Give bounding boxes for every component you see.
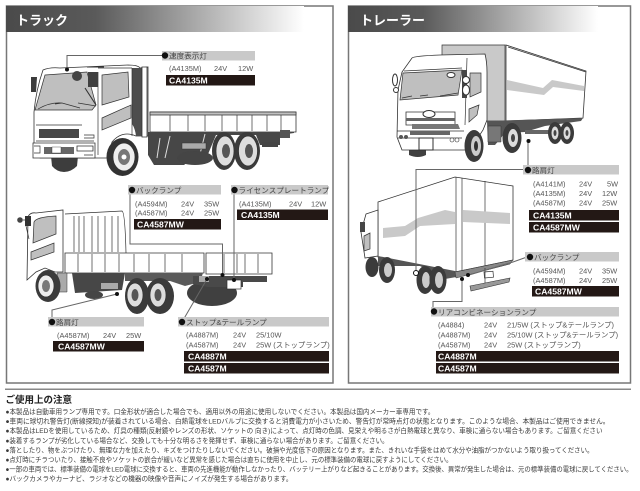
trailer illustration: rear three-quarter view: [360, 177, 513, 294]
leader line: license plate lamp: [233, 190, 235, 280]
callout: back lamp: 24V: [579, 276, 592, 285]
callout: back lamp: CA4587MW: [137, 220, 185, 230]
callout: back lamp: (A4587M): [533, 276, 565, 285]
callout: back lamp: バックランプ: [534, 253, 580, 262]
notes list: ●車両に球切れ警告灯(断線探知)が装着されている場合、白熱電球をLEDバルブに交換すると消費電力が小さいため、警告灯が常時点灯の状態となります。このような場合、本製品はご使用できません。: [6, 417, 610, 426]
callout: back lamp: バックランプ: [136, 186, 182, 195]
callout: stop and tail lamp: ストップ&テールランプ: [186, 318, 267, 327]
leader line: back lamp: [130, 190, 222, 275]
trailer illustration: front three-quarter view: [392, 45, 586, 162]
callout: side marker lamp: CA4587MW: [533, 222, 581, 232]
callout: back lamp: (A4594M): [135, 200, 167, 208]
callout: rear combination lamp: CA4887M: [438, 352, 477, 362]
callout: back lamp: 25W: [602, 276, 617, 285]
callout: speed indicator: 12W: [238, 64, 253, 73]
leader line: speed indicator: [67, 56, 162, 69]
callout: stop and tail lamp: (A4587M): [186, 340, 218, 350]
heading: trailer: [348, 6, 598, 32]
notes list: ●本製品はLEDを使用しているため、灯具の種類(反射鏡やレンズの形状、ソケットの 向き)によって、点灯時の色調、見栄えや明るさが白熱電球と異なり、車検に通らない場合もあります。ご留意ください: [6, 426, 603, 435]
callout: back lamp: 35W: [204, 200, 219, 208]
notes list: ●点灯時にチラついたり、接触不良やソケットの嵌合が緩いなど異常を感じた場合は直ちに使用を中止し、元の標準装備の電球に戻すようにしてください。: [6, 455, 452, 464]
callout: rear combination lamp: (A4884): [438, 320, 464, 330]
callout: back lamp: (A4594M): [533, 266, 565, 276]
callout: rear combination lamp: [431, 307, 619, 374]
marker: stop and tail lamp: [205, 277, 209, 281]
leader line: stop and tail lamp: [182, 279, 207, 322]
callout: side marker lamp: 24V: [579, 189, 592, 198]
callout: stop and tail lamp: 24V: [233, 340, 246, 350]
marker: license plate lamp: [232, 278, 236, 282]
callout: side marker lamp: 24V: [579, 198, 592, 208]
notes section: [5, 388, 632, 483]
callout: rear combination lamp: 25/10W (ストップ&テールランプ): [507, 330, 618, 340]
heading: truck: トラック: [16, 13, 68, 28]
callout: side marker lamp: 12W: [602, 189, 617, 198]
callout: back lamp: 24V: [181, 200, 194, 208]
callout: license plate lamp: [231, 185, 330, 220]
callout: side marker lamp: CA4135M: [533, 210, 572, 220]
callout: speed indicator: CA4135M: [169, 76, 208, 86]
callout: back lamp: 24V: [579, 266, 592, 276]
callout: side marker lamp: 路肩灯: [56, 317, 79, 327]
callout: rear combination lamp: CA4587M: [438, 364, 477, 374]
truck illustration: rear three-quarter view: [17, 210, 272, 314]
leader line: side marker: [52, 294, 117, 322]
callout: back lamp: 24V: [181, 208, 194, 218]
callout: rear combination lamp: 24V: [484, 340, 497, 350]
callout: stop and tail lamp: 25W (ストップランプ): [256, 340, 330, 350]
callout: back lamp: CA4587MW: [535, 286, 583, 296]
callout: side marker lamp: (A4135M): [533, 189, 565, 198]
marker: speed indicator lamp: [65, 68, 69, 72]
leader line: side marker rear view: [416, 170, 523, 273]
callout: side marker lamp: (A4141M): [533, 180, 565, 188]
callout: speed indicator: 24V: [214, 64, 227, 73]
callout: side marker lamp: [523, 165, 619, 232]
callout: rear combination lamp: 25W (ストップランプ): [507, 340, 581, 350]
callout: rear combination lamp: 24V: [484, 330, 497, 340]
leader line: rear combination lamp: [433, 279, 462, 311]
callout: side marker lamp: (A4587M): [533, 198, 565, 208]
notes list: ●落としたり、物をぶつけたり、無理な力を加えたり、キズをつけたりしないでください。破損や光度低下の原因となります。また、きれいな手袋をはめて水分や油脂がつかないよう取り扱ってください。: [6, 445, 594, 454]
callout: license plate lamp: ライセンスプレートランプ: [238, 186, 330, 195]
callout: license plate lamp: 12W: [311, 200, 326, 208]
callout: side marker lamp: 25W: [602, 198, 617, 208]
panel: trailer: [348, 6, 630, 383]
notes list: ●装着するランプが劣化している場合など、交換しても十分な明るさを発揮せず、車検に通らない場合があります。ご留意ください。: [6, 436, 388, 445]
callout: speed indicator: 速度表示灯: [169, 50, 207, 60]
callout: stop and tail lamp: CA4587M: [188, 364, 227, 374]
heading: truck: [6, 6, 304, 32]
leader line: back lamp: [469, 257, 527, 275]
callout: license plate lamp: CA4135M: [241, 210, 280, 220]
marker: side marker rear view: [414, 270, 418, 276]
callout: speed indicator: [162, 50, 255, 86]
callout: side marker lamp: CA4587MW: [58, 342, 106, 352]
callout: side marker lamp: (A4587M): [57, 331, 89, 340]
callout: stop and tail lamp: CA4887M: [188, 352, 227, 362]
callout: stop and tail lamp: (A4887M): [186, 330, 218, 340]
notes list: ●バックカメラやカーナビ、ラジオなどの機器の映像や音声にノイズが発生する場合があります。: [6, 474, 292, 483]
heading: trailer: トレーラー: [360, 13, 425, 28]
callout: back lamp: 35W: [602, 266, 617, 276]
callout: back lamp: (A4587M): [135, 208, 167, 218]
notes heading: ご使用上の注意: [6, 394, 73, 406]
marker: side marker: [526, 139, 530, 143]
callout: rear combination lamp: 24V: [484, 320, 497, 330]
callout: side marker lamp: 24V: [103, 331, 116, 340]
callout: back lamp: [128, 185, 221, 230]
callout: rear combination lamp: 21/5W (ストップ&テールランプ): [507, 320, 614, 330]
callout: license plate lamp: (A4135M): [239, 200, 271, 208]
leader line: side marker: [527, 141, 529, 170]
callout: rear combination lamp: (A4887M): [438, 330, 470, 340]
callout: side marker lamp: 24V: [579, 180, 592, 188]
marker: side marker: [115, 292, 119, 296]
notes list: [6, 407, 632, 483]
callout: license plate lamp: 24V: [289, 200, 302, 208]
panel: truck: [6, 6, 333, 383]
callout: rear combination lamp: リアコンビネーションランプ: [438, 308, 537, 317]
callout: side marker lamp: 5W: [607, 180, 618, 188]
callout: back lamp: [525, 252, 619, 296]
callout: side marker lamp: 路肩灯: [532, 165, 555, 175]
callout: rear combination lamp: (A4587M): [438, 340, 470, 350]
callout: side marker lamp: [48, 317, 144, 352]
callout: stop and tail lamp: 24V: [233, 330, 246, 340]
truck illustration: front three-quarter view: [31, 65, 296, 176]
marker: rear combination lamp: [460, 277, 464, 281]
marker: back lamp: [466, 273, 470, 277]
callout: speed indicator: (A4135M): [169, 64, 201, 73]
callout: stop and tail lamp: [178, 317, 330, 374]
callout: side marker lamp: 25W: [126, 331, 141, 340]
marker: back lamp: [220, 273, 224, 277]
notes list: ●本製品は自動車用ランプ専用です。口金形状が適合した場合でも、適用以外の用途に使用しないでください。本製品は国内メーカー車専用です。: [6, 407, 434, 416]
callout: back lamp: 25W: [204, 208, 219, 218]
callout: stop and tail lamp: 25/10W: [256, 330, 281, 340]
